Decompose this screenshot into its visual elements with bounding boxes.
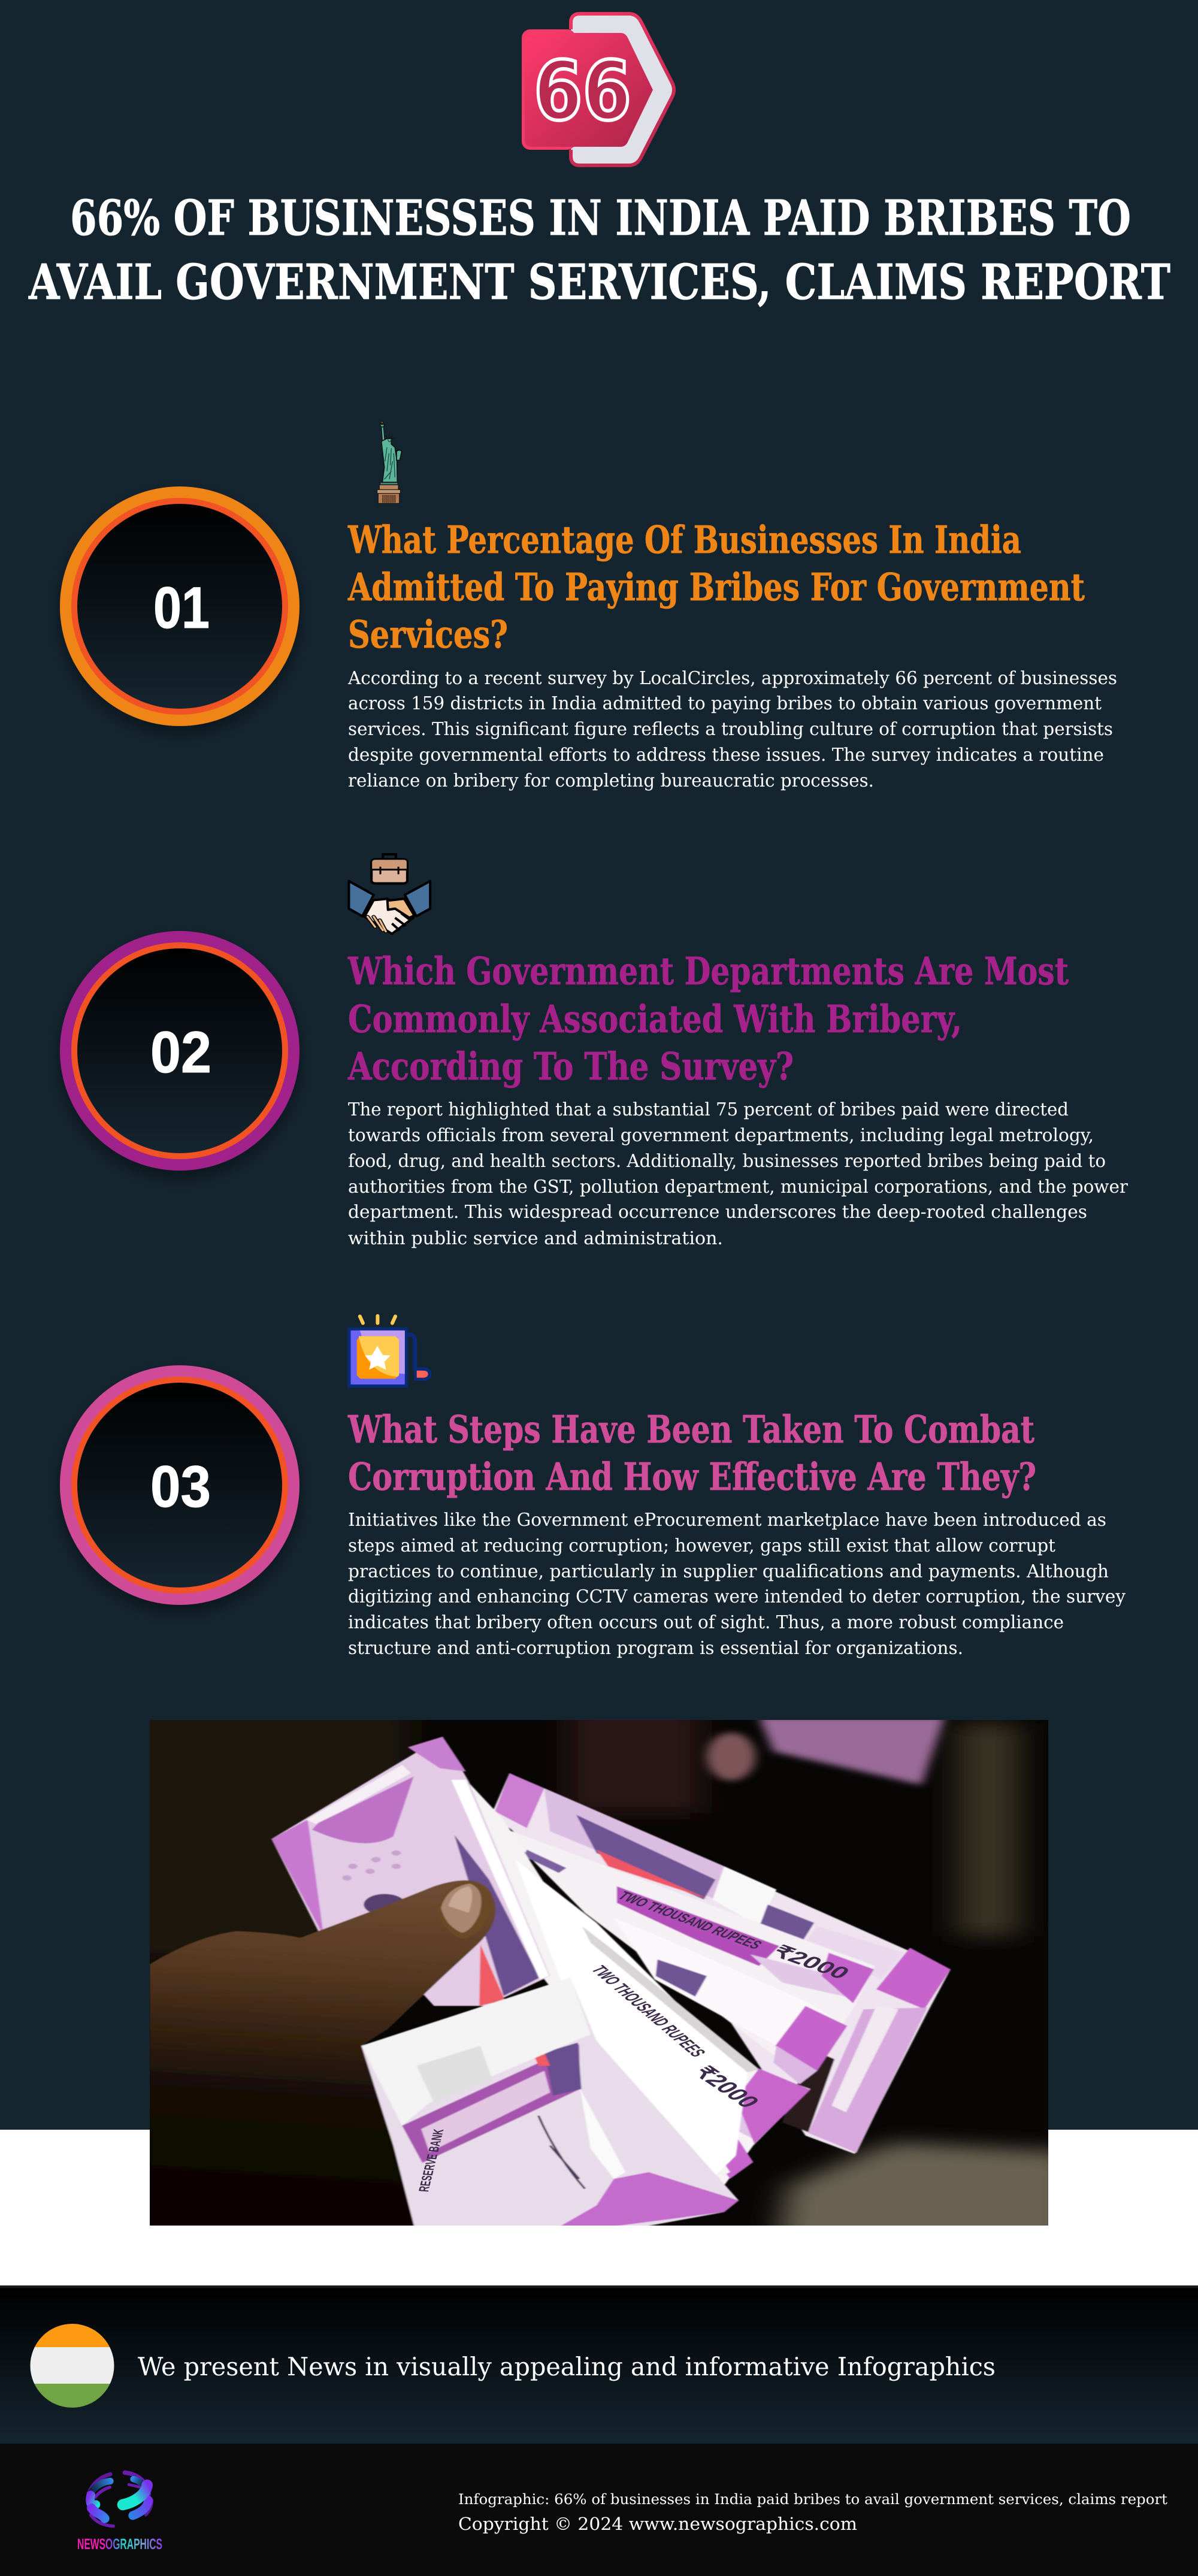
logo: Newsographics [77,2472,162,2553]
body text 1: despite governmental efforts to address these issues. The survey indicates a routine [348,745,1104,766]
blurred note, top right [759,1717,945,1785]
white page edges [463,1776,730,2182]
white band behind photo [0,2130,1198,2285]
number badge 02: 02 [150,1019,211,1085]
body text 1: across 159 districts in India admitted to paying bribes to obtain various government [348,693,1102,714]
body text 2: department. This widespread occurrence underscores the deep-rooted challenges [348,1202,1087,1223]
number badge 03 [60,1365,300,1605]
body text 2: authorities from the GST, pollution department, municipal corporations, and the power [348,1177,1129,1198]
body text 2: The report highlighted that a substantial 75 percent of bribes paid were directed [348,1099,1069,1120]
heading 1: Services? [348,612,508,657]
front left note [271,1737,550,2006]
blurred photo background [150,1720,1048,2226]
middle note 1 [510,1830,875,2055]
bottom front note [361,1978,739,2235]
panel: question 1 [60,421,1117,791]
number badge 01: 01 [153,575,210,640]
body text 3: practices to continue, particularly in supplier qualifications and payments. Although [348,1561,1109,1582]
logo: Newsographics: NEWSOGRAPHICS [77,2536,162,2553]
banknote printed text: RESERVE BANK [416,2128,447,2193]
icon: mug with star [347,1316,432,1388]
icon: statue of liberty [377,421,402,503]
dark strip above tagline [0,2285,1198,2288]
body text 1 [347,668,1117,791]
banknote printed text: TWO THOUSAND RUPEES [587,1963,710,2059]
icon: India flag circle [30,2324,114,2408]
banknote printed text: ₹2000 [688,2063,766,2111]
footer credit text [458,2491,1167,2534]
body text 2 [348,1099,1129,1249]
heading 2: According To The Survey? [347,1044,794,1089]
body text 3: indicates that bribery often occurs out of sight. Thus, a more robust compliance [348,1612,1064,1633]
icon: 66 badge [522,14,674,165]
footer credit text: Copyright © 2024 www.newsographics.com [458,2514,857,2534]
photo: hand holding rupee notes [150,1720,1048,2226]
heading 1 [347,518,1085,657]
panel: tagline band [0,2288,1198,2444]
panel: question 3 [60,1316,1126,1659]
body text 2: food, drug, and health sectors. Additionally, businesses reported bribes being paid to [348,1151,1106,1172]
body text 1: reliance on bribery for completing bureaucratic processes. [348,770,874,791]
heading 2: Commonly Associated With Bribery, [348,997,962,1041]
heading 2 [347,949,1069,1089]
panel: question 2 [60,854,1129,1249]
body text 1: According to a recent survey by LocalCircles, approximately 66 percent of businesses [347,668,1117,689]
heading 1: What Percentage Of Businesses In India [347,518,1021,562]
banknote printed text: TWO THOUSAND RUPEES [615,1889,766,1952]
icon: 66 badge: 66 [534,44,631,139]
banknote printed text: ₹2000 [767,1942,855,1983]
number badge 01 [60,486,300,726]
heading 3 [347,1407,1036,1499]
hand [150,1880,495,2235]
number badge 02 [60,931,300,1171]
body text 3: digitizing and enhancing CCTV cameras were intended to deter corruption, the survey [348,1586,1126,1607]
middle note 2 [635,1951,723,2016]
tagline text: We present News in visually appealing and informative Infographics [138,2352,996,2381]
body text 3: Initiatives like the Government eProcurement marketplace have been introduced as [348,1510,1106,1531]
body text 3: structure and anti-corruption program is essential for organizations. [348,1638,963,1659]
body text 2: within public service and administration. [348,1228,723,1249]
back note stack [492,1773,951,2154]
title [28,190,1170,311]
body text 2: towards officials from several government departments, including legal metrology, [348,1125,1094,1146]
heading 3: Corruption And How Effective Are They? [348,1455,1036,1499]
body text 3 [348,1510,1126,1659]
banknote printed text [416,1889,855,2193]
icon: handshake with briefcase [349,854,430,934]
body text 3: steps aimed at reducing corruption; however, gaps still exist that allow corrupt [348,1535,1055,1556]
panel: footer [0,2444,1198,2576]
body text 1: services. This significant figure reflects a troubling culture of corruption that persists [348,719,1113,740]
heading 3: What Steps Have Been Taken To Combat [347,1407,1034,1452]
number badge 03: 03 [150,1453,211,1519]
footer credit text: Infographic: 66% of businesses in India paid bribes to avail government services, claims report [458,2491,1167,2508]
lower fan note [718,2069,811,2185]
